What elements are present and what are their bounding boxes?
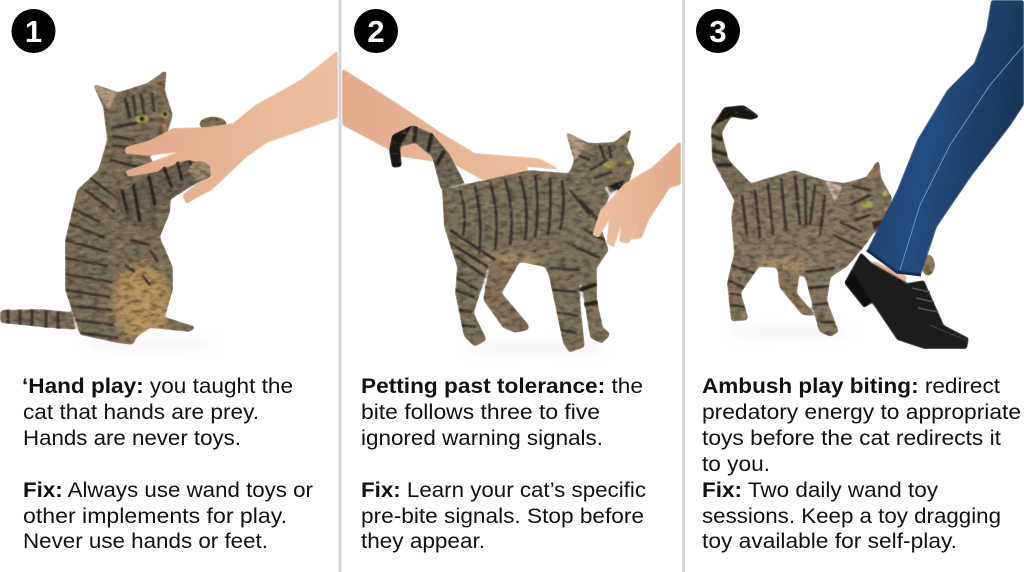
caption: hand play: Hands are never toys. <box>23 426 241 450</box>
number badge 2: 2 <box>367 14 385 49</box>
caption: hand play: other implements for play. <box>23 504 287 528</box>
panel: hand play <box>0 9 338 553</box>
caption: petting past tolerance: Petting past tolerance: the <box>361 374 643 398</box>
caption: hand play <box>22 374 313 553</box>
number badge 1: 1 <box>25 14 42 49</box>
caption: ambush play biting: Ambush play biting: redirect <box>702 374 1000 398</box>
caption: petting past tolerance: ignored warning signals. <box>361 426 603 450</box>
caption: ambush play biting <box>702 374 1021 553</box>
illustration: cat biting a hand <box>0 50 338 348</box>
caption: ambush play biting: toy available for self-play. <box>702 529 957 553</box>
number badge 1 <box>12 9 56 53</box>
illustration: cat biting a leg <box>711 0 1024 349</box>
caption: petting past tolerance: pre-bite signals. Stop before <box>361 504 644 528</box>
caption: ambush play biting: predatory energy to appropriate <box>702 400 1021 424</box>
caption: petting past tolerance <box>361 374 646 553</box>
caption: hand play: Fix: Always use wand toys or <box>23 478 313 502</box>
caption: petting past tolerance: bite follows three to five <box>361 400 600 424</box>
caption: hand play: Never use hands or feet. <box>23 529 268 553</box>
caption: hand play: ‘Hand play: you taught the <box>22 374 293 398</box>
caption: hand play: cat that hands are prey. <box>23 400 259 424</box>
number badge 3: 3 <box>709 14 727 49</box>
caption: ambush play biting: to you. <box>702 452 770 476</box>
illustration: cat biting while petted <box>342 68 681 353</box>
number badge 3 <box>696 9 740 53</box>
caption: petting past tolerance: they appear. <box>361 529 485 553</box>
caption: ambush play biting: sessions. Keep a toy dragging <box>702 504 1001 528</box>
panel: petting past tolerance <box>342 9 681 553</box>
panel: ambush play biting <box>696 0 1024 553</box>
caption: petting past tolerance: Fix: Learn your cat’s specific <box>361 478 646 502</box>
caption: ambush play biting: Fix: Two daily wand toy <box>702 478 938 502</box>
caption: ambush play biting: toys before the cat redirects it <box>702 426 1001 450</box>
number badge 2 <box>354 9 398 53</box>
